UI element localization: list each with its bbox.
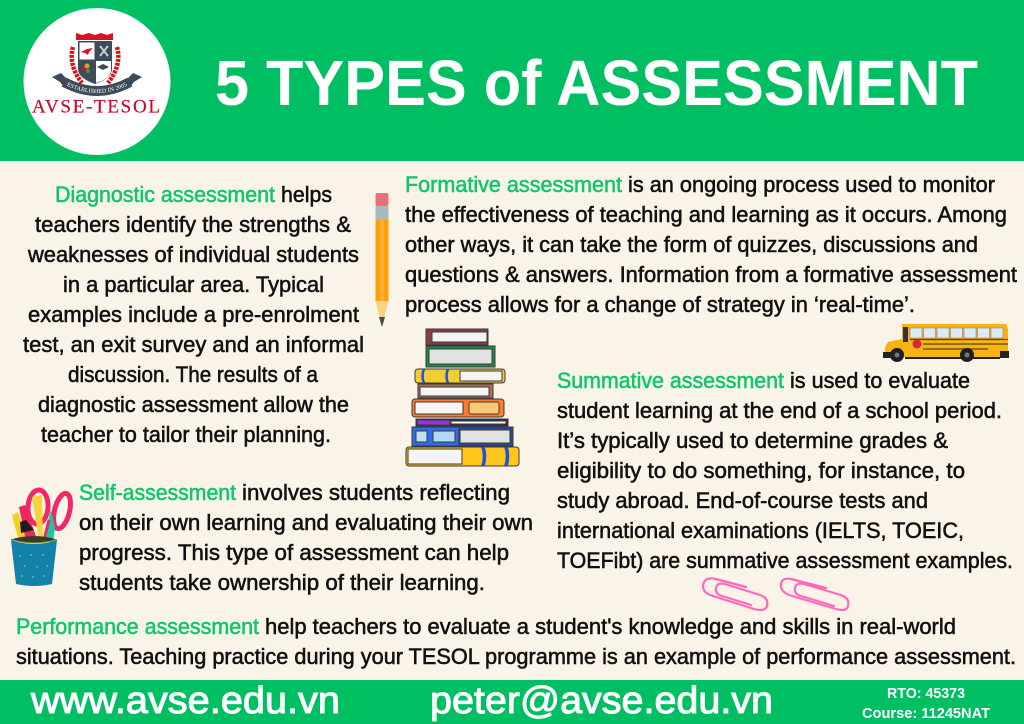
title: 5 TYPES of ASSESSMENT (215, 47, 978, 119)
text block: diagnostic assessment: discussion. The results of a (68, 362, 319, 387)
text block: diagnostic assessment: teacher to tailor their planning. (41, 422, 331, 447)
icon: paper clips (703, 578, 848, 610)
text block: self-assessment: involves students reflecting (242, 480, 510, 505)
website: www.avse.edu.vn (30, 680, 340, 722)
text block: performance assessment (16, 614, 1016, 669)
icon: stack of books (406, 329, 519, 466)
text block: diagnostic assessment: weaknesses of individual students (27, 242, 359, 267)
text block: diagnostic assessment: test, an exit survey and an informal (23, 332, 364, 357)
text block: diagnostic assessment: teachers identify the strengths & (35, 212, 351, 237)
text block: diagnostic assessment: Diagnostic assessment (55, 182, 275, 207)
text block: summative assessment: is used to evaluate (790, 368, 970, 393)
text block: summative assessment: study abroad. End-of-course tests and (557, 488, 928, 513)
icon: pencil (376, 193, 388, 327)
text block: formative assessment: other ways, it can take the form of quizzes, discussions and (405, 232, 978, 257)
text block: performance assessment: situations. Teaching practice during your TESOL programme is an example of performance assessment. (16, 644, 1016, 669)
text block: self-assessment: students take ownership of their learning. (79, 570, 485, 595)
icon: pencil cup with scissors (11, 489, 74, 586)
footer band (0, 680, 1024, 724)
text block: summative assessment (557, 368, 1013, 573)
text block: formative assessment: is an ongoing process used to monitor (628, 172, 995, 197)
email: peter@avse.edu.vn (430, 680, 773, 722)
text block: self-assessment (79, 480, 533, 595)
text block: diagnostic assessment: helps (281, 182, 332, 207)
registration numbers (862, 686, 990, 722)
icon: school bus (883, 324, 1009, 362)
logo: AVSE-TESOL crest: ESTABLISHED IN 2005 (66, 82, 127, 93)
text block: summative assessment: eligibility to do something, for instance, to (557, 458, 965, 483)
text block: summative assessment: TOEFibt) are summative assessment examples. (557, 548, 1013, 573)
text block: summative assessment: It’s typically used to determine grades & (557, 428, 948, 453)
registration numbers: RTO: 45373 (887, 686, 965, 702)
logo: AVSE-TESOL crest: AVSE-TESOL (32, 96, 160, 118)
logo: AVSE-TESOL crest (24, 8, 170, 155)
text block: formative assessment: the effectiveness of teaching and learning as it occurs. Among (405, 202, 1007, 227)
text block: diagnostic assessment: diagnostic assessment allow the (38, 392, 349, 417)
registration numbers: Course: 11245NAT (862, 706, 990, 722)
text block: formative assessment: process allows for a change of strategy in ‘real-time’. (405, 292, 915, 317)
text block: formative assessment: questions & answers. Information from a formative assessment (405, 262, 1017, 287)
text block: summative assessment: student learning at the end of a school period. (557, 398, 1002, 423)
text block: diagnostic assessment: in a particular area. Typical (63, 272, 324, 297)
text block: formative assessment (405, 172, 1017, 317)
text block: self-assessment: Self-assessment (79, 480, 236, 505)
text block: self-assessment: progress. This type of assessment can help (79, 540, 509, 565)
text block: summative assessment: international examinations (IELTS, TOEIC, (557, 518, 964, 543)
text block: self-assessment: on their own learning and evaluating their own (79, 510, 533, 535)
header band (0, 0, 1024, 161)
text block: performance assessment: Performance assessment (16, 614, 259, 639)
text block: diagnostic assessment (23, 182, 364, 447)
text block: diagnostic assessment: examples include a pre-enrolment (28, 302, 359, 327)
text block: summative assessment: Summative assessment (557, 368, 784, 393)
text block: performance assessment: help teachers to evaluate a student's knowledge and skills in real-world (265, 614, 956, 639)
text block: formative assessment: Formative assessment (405, 172, 622, 197)
